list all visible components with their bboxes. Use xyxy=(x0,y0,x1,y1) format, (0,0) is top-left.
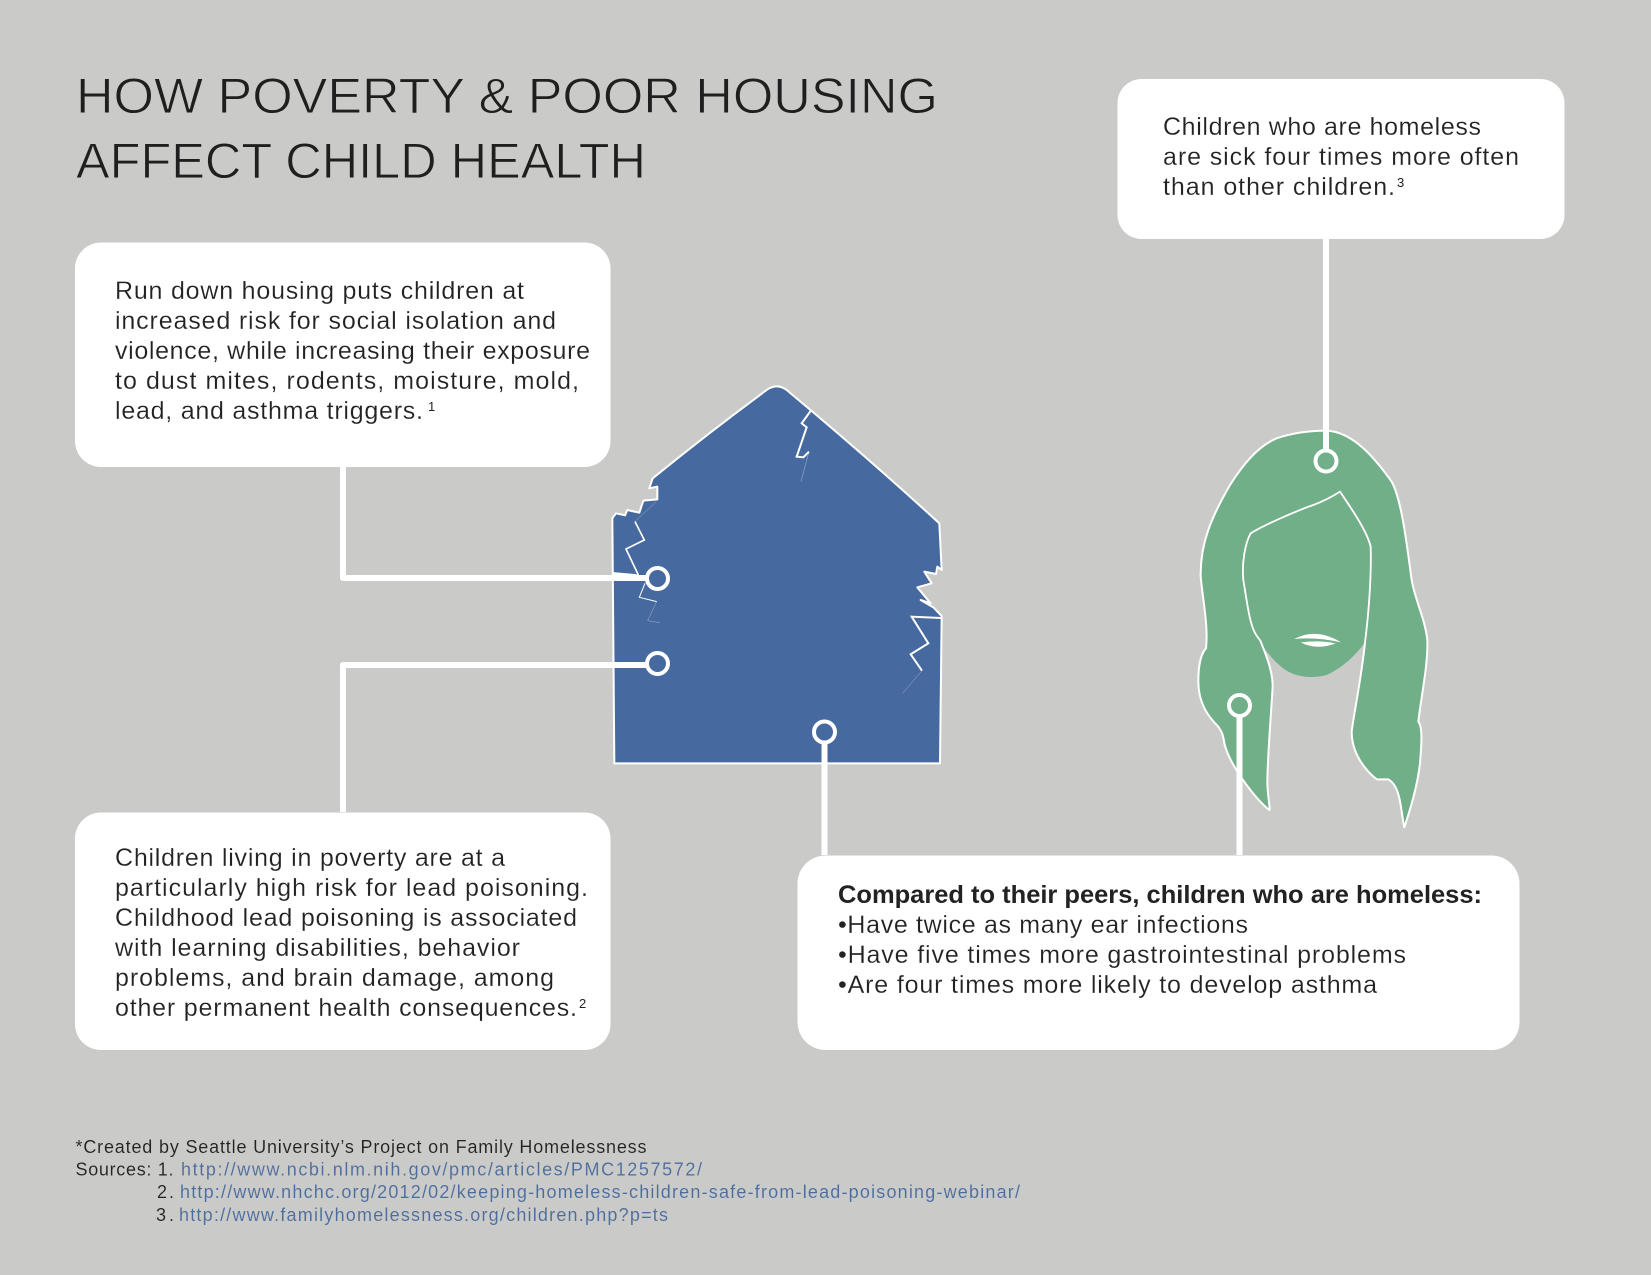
footer: credit and sources xyxy=(76,1137,1020,1225)
title xyxy=(76,68,938,189)
panel: compared to peers: Compared to their peers, children who are homeless: xyxy=(838,881,1482,909)
panel: lead poisoning xyxy=(75,812,610,1050)
marker circles on house xyxy=(647,568,835,742)
connector: peers to house xyxy=(822,742,828,855)
connector: run-down housing to house xyxy=(343,467,647,578)
panel: lead poisoning: Children living in poverty are at a xyxy=(115,844,505,872)
panel: run down housing: increased risk for social isolation and xyxy=(115,307,556,335)
panel: lead poisoning: 2 xyxy=(579,996,586,1011)
panel: lead poisoning: with learning disabilities, behavior xyxy=(114,934,520,962)
panel: homeless children sick more often xyxy=(1118,79,1564,239)
panel: compared to peers: •Have twice as many ear infections xyxy=(838,911,1248,939)
panel: run down housing: to dust mites, rodents, moisture, mold, xyxy=(115,367,579,395)
icon: damaged house xyxy=(612,386,942,763)
panel: run down housing: lead, and asthma triggers. xyxy=(115,397,423,425)
panel: homeless children sick more often: than other children. xyxy=(1163,173,1395,201)
connector: homeless to hair xyxy=(1323,239,1329,451)
connector: peers to hair xyxy=(1236,716,1242,855)
marker circles on hair xyxy=(1229,450,1336,716)
panel: lead poisoning: problems, and brain damage, among xyxy=(115,964,554,992)
panel: lead poisoning: Childhood lead poisoning is associated xyxy=(115,904,577,932)
footer: credit and sources: *Created by Seattle University’s Project on Family Homelessness xyxy=(76,1137,646,1157)
panel: run down housing: Run down housing puts children at xyxy=(115,277,524,305)
footer: credit and sources: http://www.familyhomelessness.org/children.php?p=ts xyxy=(179,1205,668,1225)
panel: run down housing: violence, while increasing their exposure xyxy=(115,337,590,365)
icon: child with long hair xyxy=(1198,431,1427,827)
panel: lead poisoning: other permanent health consequences. xyxy=(115,994,577,1022)
panel: run down housing: 1 xyxy=(428,399,435,414)
panel: compared to peers xyxy=(798,856,1520,1050)
footer: credit and sources: http://www.nhchc.org/2012/02/keeping-homeless-children-safe-from-lead-poisoning-webinar/ xyxy=(180,1182,1020,1202)
title: AFFECT CHILD HEALTH xyxy=(76,133,646,189)
panel: homeless children sick more often: Children who are homeless xyxy=(1163,113,1481,141)
panel: compared to peers: •Have five times more gastrointestinal problems xyxy=(838,941,1406,969)
panel: run down housing xyxy=(75,242,610,467)
title: HOW POVERTY & POOR HOUSING xyxy=(76,68,938,124)
panel: homeless children sick more often: 3 xyxy=(1397,175,1404,190)
panel: compared to peers: •Are four times more likely to develop asthma xyxy=(838,971,1377,999)
footer: credit and sources: 3. xyxy=(156,1205,174,1225)
connector wedge on house wall xyxy=(612,572,650,581)
panel: homeless children sick more often: are sick four times more often xyxy=(1163,143,1519,171)
footer: credit and sources: http://www.ncbi.nlm.nih.gov/pmc/articles/PMC1257572/ xyxy=(181,1160,702,1180)
connector: poverty to house xyxy=(343,665,647,812)
footer: credit and sources: Sources: 1. xyxy=(76,1160,174,1180)
icon: mouth xyxy=(1294,634,1341,647)
footer: credit and sources: 2. xyxy=(157,1182,174,1202)
panel: lead poisoning: particularly high risk for lead poisoning. xyxy=(115,874,588,902)
